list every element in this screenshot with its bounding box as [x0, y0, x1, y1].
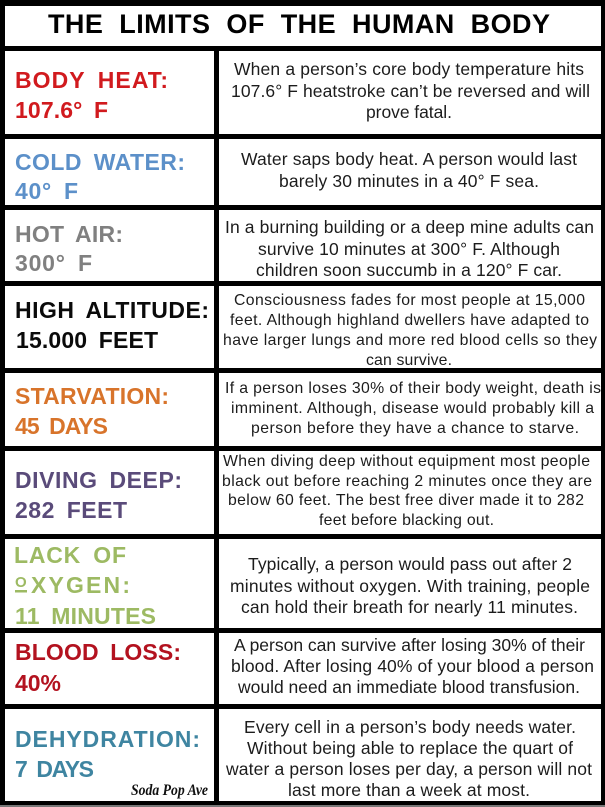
heading: hot air — [15, 221, 123, 276]
heading: starvation: STARVATION: — [15, 383, 169, 409]
text: lack of oxygen description: Typically, a person would pass out after 2 — [248, 554, 572, 574]
text: starvation description — [225, 380, 601, 437]
panel: blood loss — [5, 633, 601, 704]
text: starvation description: person before they have a chance to starve. — [251, 420, 579, 437]
heading: cold water: COLD WATER: — [15, 149, 185, 175]
panel: high altitude — [5, 286, 601, 369]
heading: diving deep: DIVING DEEP: — [15, 467, 182, 493]
heading: starvation: 45 DAYS — [15, 413, 108, 439]
text: dehydration description: Without being able to replace the quart of — [247, 738, 573, 758]
heading: diving deep: 282 FEET — [15, 497, 127, 523]
panel: hot air — [5, 210, 601, 281]
text: dehydration description: water a person loses per day, a person will not — [225, 759, 592, 779]
title — [5, 6, 601, 46]
heading: cold water — [15, 149, 185, 204]
text: diving deep description: black out before reaching 2 minutes once they are — [222, 473, 592, 490]
heading: diving deep — [15, 467, 182, 523]
heading: body heat — [15, 67, 168, 123]
text: high altitude description: can survive. — [366, 352, 452, 369]
text: lack of oxygen description: can hold their breath for nearly 11 minutes. — [241, 597, 578, 617]
text: blood loss description: blood. After losing 40% of your blood a person — [231, 656, 594, 676]
text: high altitude description: Consciousness fades for most people at 15,000 — [234, 292, 585, 309]
text: starvation description: If a person loses 30% of their body weight, death is — [225, 380, 601, 397]
panel: dehydration — [5, 709, 601, 801]
heading: cold water: 40° F — [15, 178, 78, 204]
text: hot air description: In a burning building or a deep mine adults can — [225, 217, 594, 237]
panel: body heat — [5, 51, 601, 134]
panel: starvation — [5, 373, 601, 446]
heading: starvation — [15, 383, 169, 439]
text: body heat description: When a person’s core body temperature hits — [234, 59, 584, 79]
heading: dehydration — [15, 726, 200, 782]
heading: blood loss — [15, 639, 181, 696]
text: diving deep description: When diving deep without equipment most people — [223, 453, 590, 470]
heading: body heat: BODY HEAT: — [15, 67, 168, 93]
heading: lack of oxygen: 11 MINUTES — [15, 603, 156, 629]
heading: hot air: HOT AIR: — [15, 221, 123, 247]
text: high altitude description — [223, 292, 597, 369]
text: cold water description: Water saps body heat. A person would last — [241, 149, 577, 169]
heading: lack of oxygen: XYGEN: — [31, 572, 130, 598]
text: diving deep description: below 60 feet. The best free diver made it to 282 — [228, 492, 584, 509]
heading: blood loss: BLOOD LOSS: — [15, 639, 181, 665]
title: THE LIMITS OF THE HUMAN BODY — [48, 9, 550, 39]
panel: diving deep — [5, 451, 601, 534]
text: lack of oxygen description — [230, 554, 590, 617]
heading: high altitude — [15, 297, 209, 353]
text: dehydration description — [225, 717, 592, 800]
heading: blood loss: 40% — [15, 670, 61, 696]
text: blood loss description — [231, 635, 594, 697]
heading: body heat: 107.6° F — [15, 97, 108, 123]
panel: lack of oxygen — [5, 539, 601, 629]
text: high altitude description: have larger lungs and more red blood cells so they — [223, 332, 597, 349]
heading: lack of oxygen: LACK OF — [14, 542, 126, 568]
heading: high altitude: 15.000 FEET — [16, 327, 158, 353]
heading: dehydration: DEHYDRATION: — [15, 726, 200, 752]
text: blood loss description: A person can survive after losing 30% of their — [234, 635, 585, 655]
text: hot air description: children soon succumb in a 120° F car. — [256, 260, 562, 280]
text: lack of oxygen description: minutes without oxygen. With training, people — [230, 576, 590, 596]
text: blood loss description: would need an immediate blood transfusion. — [237, 677, 580, 697]
text: hot air description — [225, 217, 594, 280]
text: high altitude description: feet. Although highland dwellers have adapted to — [230, 312, 589, 329]
text: diving deep description — [222, 453, 592, 529]
text: cold water description — [241, 149, 577, 191]
text: starvation description: imminent. Although, disease would probably kill a — [231, 400, 594, 417]
heading: high altitude: HIGH ALTITUDE: — [15, 297, 209, 323]
heading: lack of oxygen: O — [15, 574, 27, 591]
text: cold water description: barely 30 minutes in a 40° F sea. — [279, 171, 539, 191]
text: dehydration description: Every cell in a person’s body needs water. — [244, 717, 576, 737]
text: dehydration description: last more than a week at most. — [288, 780, 530, 800]
text: body heat description — [231, 59, 590, 122]
text: diving deep description: feet before blacking out. — [319, 512, 494, 529]
panel: cold water — [5, 139, 601, 205]
heading: dehydration: 7 DAYS — [15, 756, 94, 782]
text: body heat description: prove fatal. — [366, 102, 452, 122]
credit: Soda Pop Ave: Soda Pop Ave — [131, 782, 208, 799]
text: body heat description: 107.6° F heatstroke can’t be reversed and will — [231, 81, 590, 101]
text: hot air description: survive 10 minutes at 300° F. Although — [258, 239, 560, 259]
heading: hot air: 300° F — [15, 250, 92, 276]
heading: lack of oxygen — [14, 542, 156, 629]
